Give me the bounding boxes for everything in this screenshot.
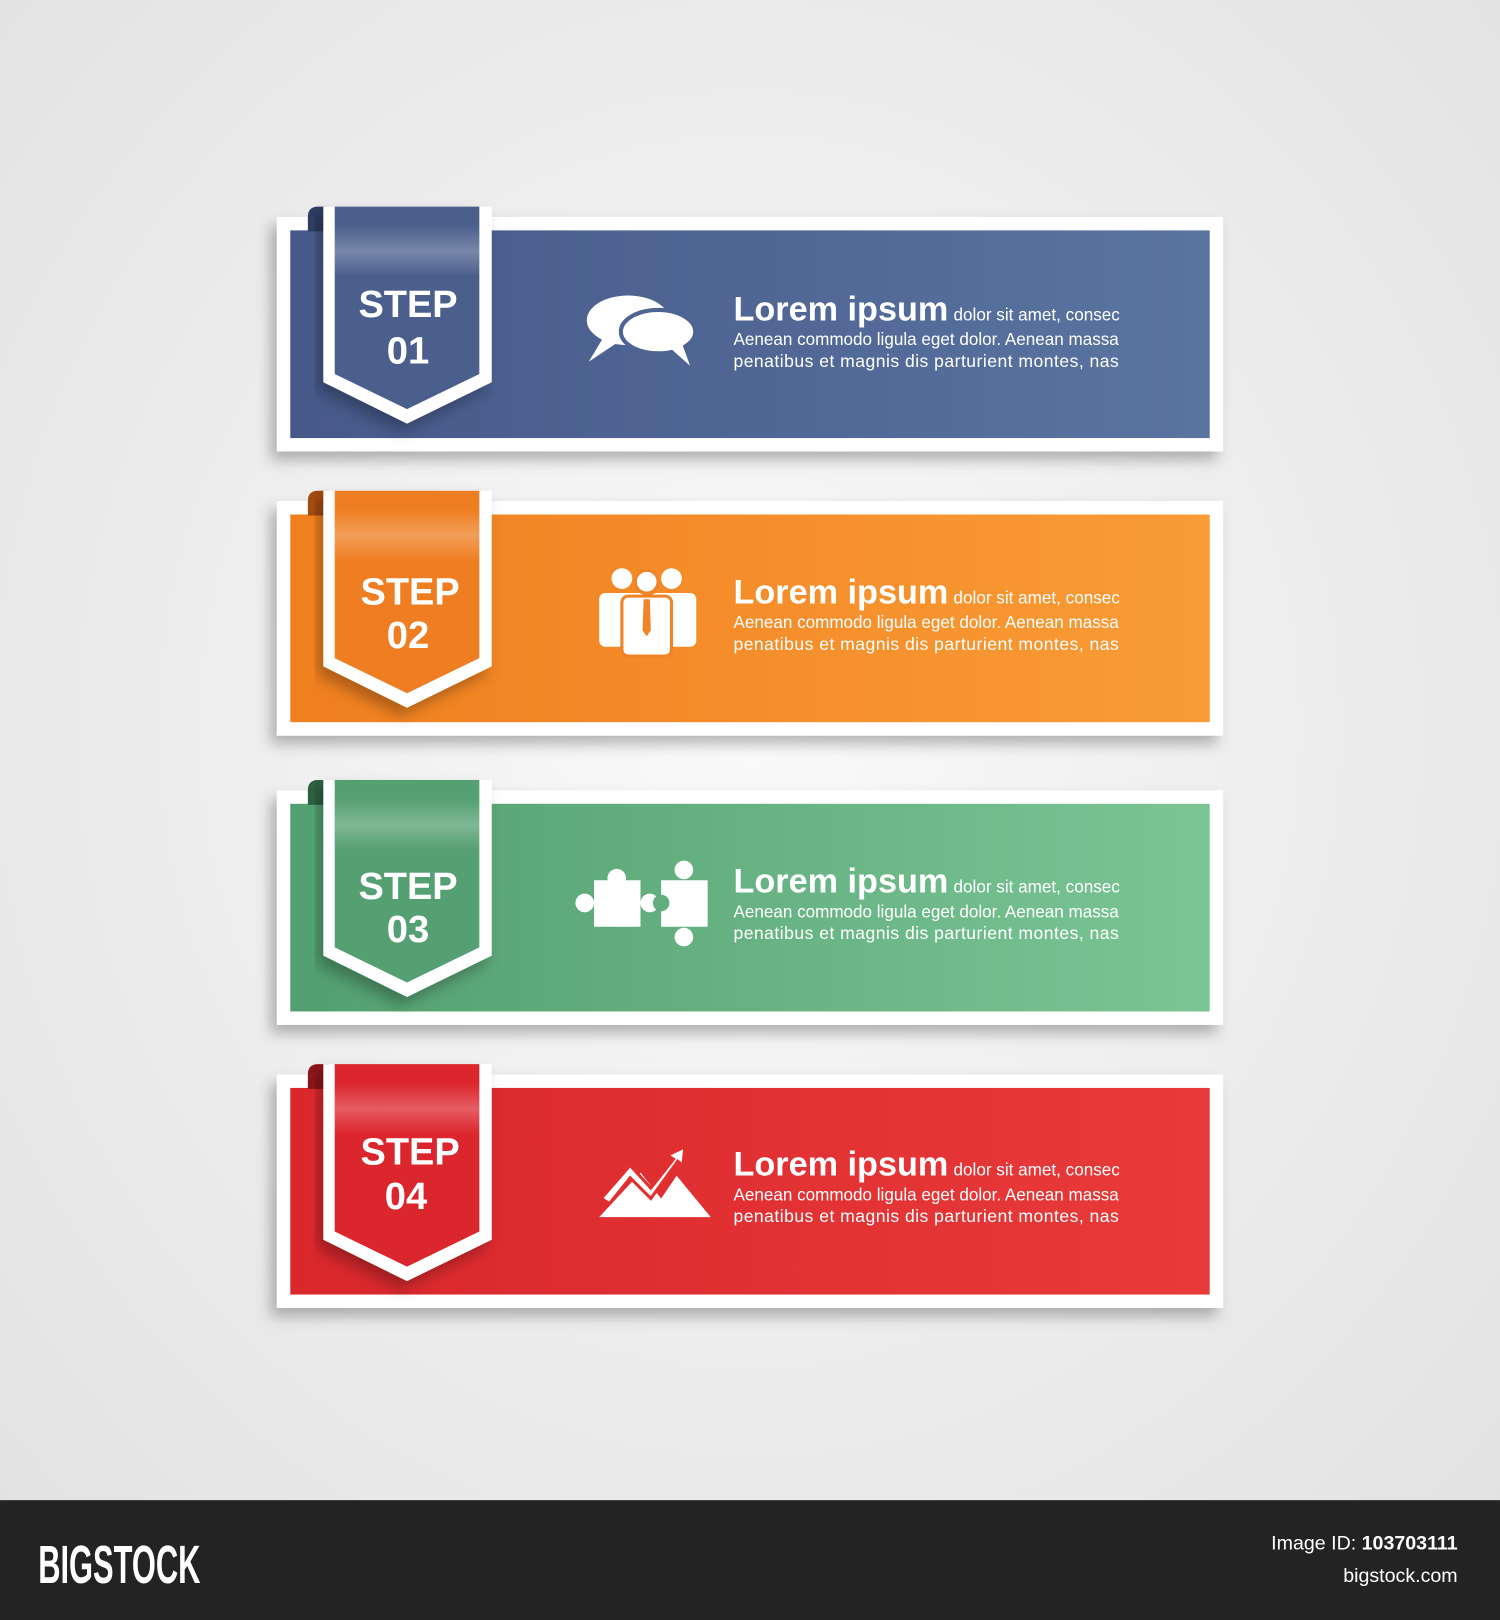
footer bar xyxy=(0,1500,1500,1620)
icon: chart mountain xyxy=(599,1147,711,1217)
panel: step 02 xyxy=(277,491,1223,736)
text block: step 04: Aenean commodo ligula eget dolor. Aenean massa xyxy=(733,1185,1119,1205)
ribbon: step 02: STEP xyxy=(361,570,460,613)
ribbon: step 04 xyxy=(308,1064,492,1281)
icon: speech bubbles xyxy=(587,295,695,366)
image id text: bigstock.com xyxy=(1343,1565,1458,1587)
text block: step 03 xyxy=(733,863,1120,943)
text block: step 01: Aenean commodo ligula eget dolor. Aenean massa xyxy=(733,329,1119,349)
text block: step 02: Aenean commodo ligula eget dolor. Aenean massa xyxy=(733,612,1119,632)
text block: step 01: penatibus et magnis dis parturient montes, nas xyxy=(733,351,1119,371)
text block: step 04: Lorem ipsum xyxy=(733,1146,948,1184)
image id text: Image ID: 103703111 xyxy=(1271,1533,1458,1555)
text block: step 03: dolor sit amet, consec xyxy=(954,877,1120,897)
icon: team xyxy=(599,568,696,656)
ribbon: step 02 xyxy=(308,491,492,708)
image id text xyxy=(1271,1533,1458,1587)
panel: step 03 xyxy=(277,780,1223,1025)
text block: step 03: Lorem ipsum xyxy=(733,863,948,901)
ribbon: step 01: 01 xyxy=(387,330,429,373)
ribbon: step 03: 03 xyxy=(387,908,429,951)
text block: step 02 xyxy=(733,573,1120,654)
text block: step 04: dolor sit amet, consec xyxy=(954,1160,1120,1180)
text block: step 02: dolor sit amet, consec xyxy=(954,587,1120,607)
text block: step 01: dolor sit amet, consec xyxy=(954,304,1120,324)
text block: step 04: penatibus et magnis dis parturient montes, nas xyxy=(733,1206,1119,1226)
panel: step 01 xyxy=(277,207,1223,451)
icon: puzzle pieces xyxy=(575,861,708,946)
panel: step 04 xyxy=(277,1064,1223,1308)
logo: BIGSTOCK: BIGSTOCK xyxy=(38,1535,201,1595)
ribbon: step 01 xyxy=(308,207,492,424)
ribbon: step 03: STEP xyxy=(358,865,458,908)
ribbon: step 04: STEP xyxy=(361,1130,460,1173)
ribbon: step 01: STEP xyxy=(358,283,458,326)
ribbon: step 02: 02 xyxy=(387,614,429,657)
text block: step 02: penatibus et magnis dis parturient montes, nas xyxy=(733,634,1119,654)
text block: step 03: Aenean commodo ligula eget dolor. Aenean massa xyxy=(733,901,1119,921)
text block: step 03: penatibus et magnis dis parturient montes, nas xyxy=(733,923,1119,943)
text block: step 01: Lorem ipsum xyxy=(733,290,948,328)
text block: step 02: Lorem ipsum xyxy=(733,573,948,611)
ribbon: step 03 xyxy=(308,780,492,997)
ribbon: step 04: 04 xyxy=(385,1175,428,1218)
text block: step 01 xyxy=(733,290,1120,371)
text block: step 04 xyxy=(733,1146,1120,1226)
